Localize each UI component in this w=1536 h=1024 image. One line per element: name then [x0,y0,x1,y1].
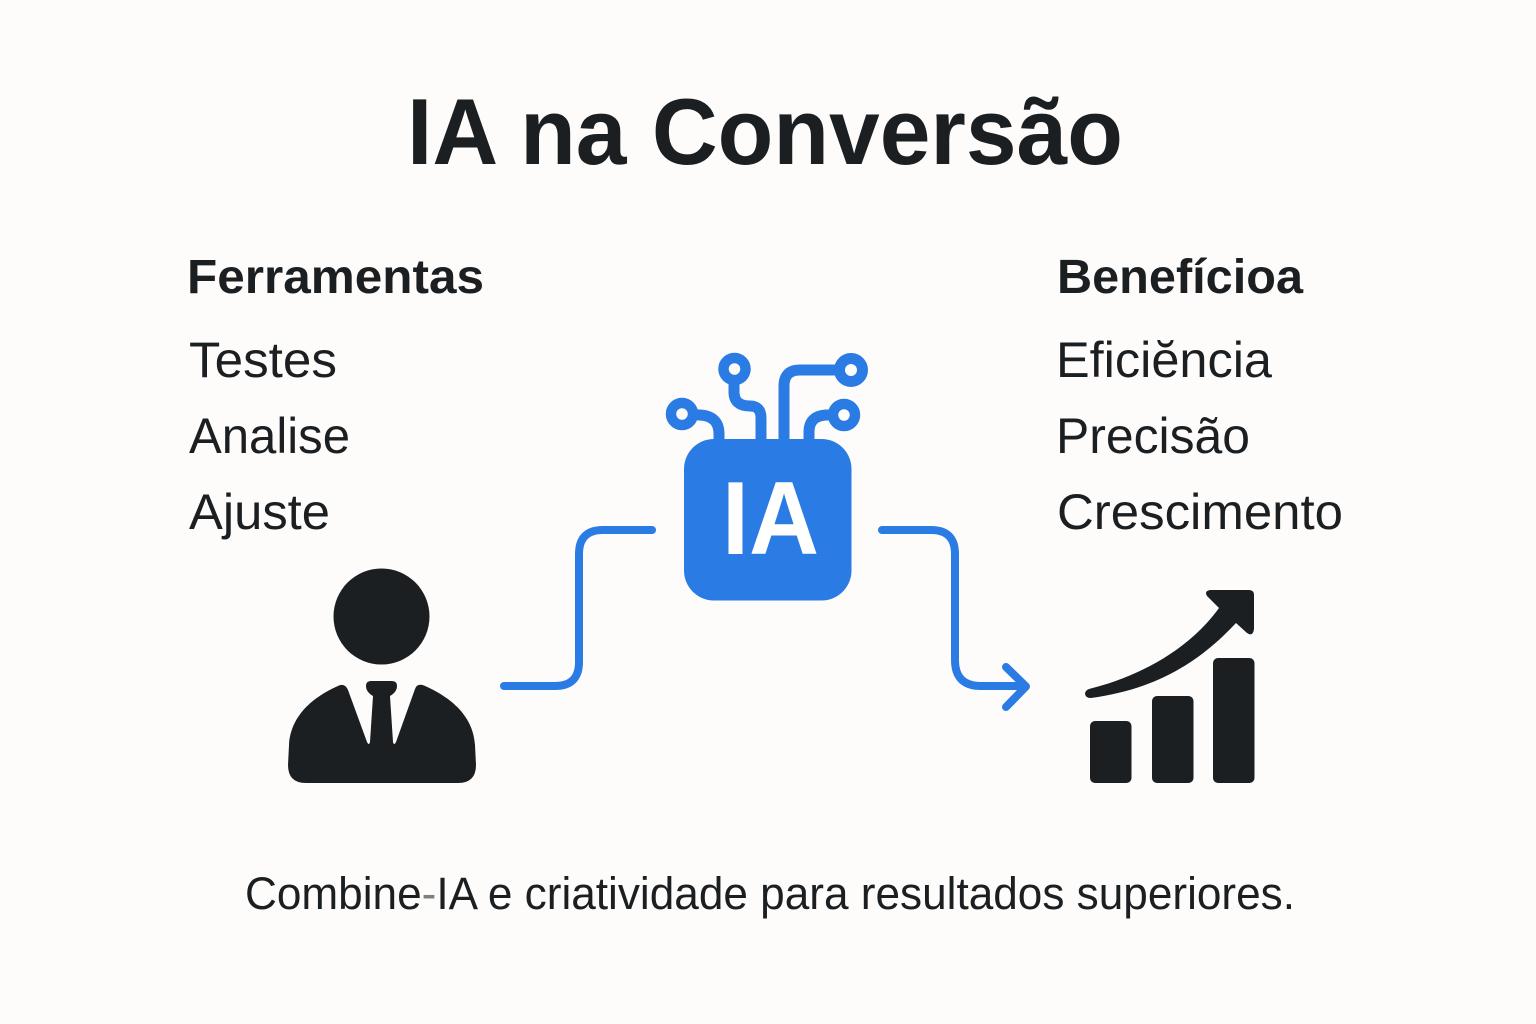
panel: beneficios [1056,251,1343,540]
circuit traces [682,369,851,442]
list item: crescimento: Crescimento [1057,484,1343,540]
chip body [684,439,852,600]
list item: ajuste: Ajuste [189,484,330,540]
chip label: IA [722,461,819,577]
icon: growth chart [1085,590,1254,783]
heading: beneficioa: Benefícioa [1057,251,1303,304]
arrow: person to ia [504,530,652,686]
bar medium [1152,696,1194,783]
list item: testes: Testes [189,332,337,388]
bar small [1090,721,1132,783]
list item: eficiencia: Eficiĕncia [1056,332,1272,388]
icon: ia chip [671,358,862,600]
heading: ferramentas: Ferramentas [187,251,484,304]
bar large [1213,658,1254,783]
growth arrow [1085,590,1254,698]
icon: person with tie [288,568,476,783]
circuit nodes [671,358,862,426]
panel: ferramentas [187,251,484,540]
footer caption: Combine-IA e criatividade para resultados superiores. [245,868,1295,919]
list item: precisao: Precisão [1056,408,1250,464]
arrow: ia to growth [882,530,1026,707]
list item: analise: Analise [189,408,350,464]
title: IA na Conversão [407,79,1123,184]
